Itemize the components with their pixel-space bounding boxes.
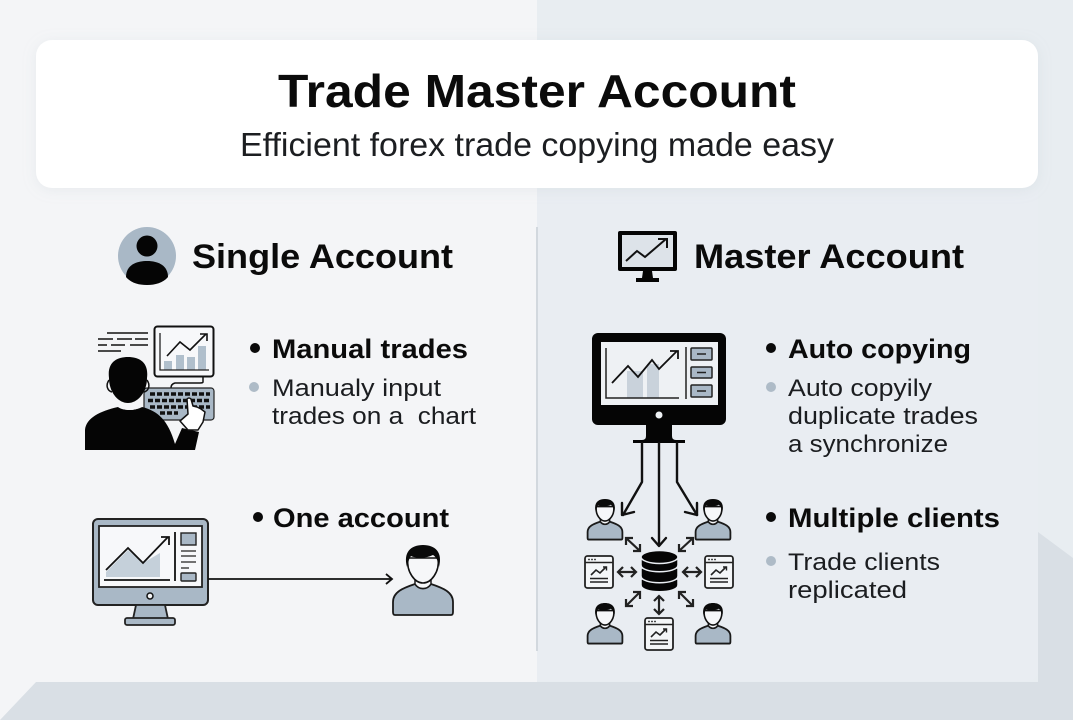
panel: master account	[585, 231, 1000, 650]
icon: master monitor	[618, 231, 677, 282]
item: one account: One account	[273, 503, 449, 533]
item: multiple clients	[766, 503, 1000, 604]
icon: chart window bottom	[645, 618, 673, 650]
heading: single account: Single Account	[192, 238, 453, 276]
item: auto copying: a synchronize	[788, 431, 948, 458]
item: multiple clients: Multiple clients	[788, 503, 1000, 533]
icon: client top right	[696, 499, 730, 540]
item: multiple clients: replicated	[788, 577, 907, 604]
icon: trading terminal	[592, 333, 726, 443]
panel: single account	[85, 227, 476, 625]
item: manual trades: trades on a chart	[272, 403, 476, 430]
heading: master account: Master Account	[694, 238, 964, 276]
icon: client top left	[588, 499, 622, 540]
item: auto copying	[766, 334, 978, 458]
arrows: terminal to network	[622, 443, 697, 546]
item: multiple clients: Trade clients	[788, 549, 940, 576]
item: auto copying: duplicate trades	[788, 403, 978, 430]
icon: client bottom left	[588, 603, 622, 644]
icon: client bottom right	[696, 603, 730, 644]
title card	[36, 40, 1038, 188]
network diagram	[585, 499, 733, 650]
title: Trade Master Account	[278, 65, 796, 117]
item: manual trades: Manualy input	[272, 375, 441, 402]
icon: trader at keyboard	[85, 326, 214, 450]
icon: single user	[393, 545, 453, 615]
item: auto copying: Auto copying	[788, 334, 971, 364]
subtitle: Efficient forex trade copying made easy	[240, 126, 835, 163]
item: manual trades	[249, 334, 476, 430]
icon: chart window left	[585, 556, 613, 588]
icon: monitor with chart	[93, 519, 208, 625]
item: manual trades: Manual trades	[272, 334, 468, 364]
double arrows	[618, 538, 701, 614]
icon: database	[641, 550, 678, 592]
icon: single user badge	[118, 227, 176, 285]
arrow: monitor to user	[208, 574, 392, 584]
item: auto copying: Auto copyily	[788, 375, 932, 402]
icon: chart window right	[705, 556, 733, 588]
